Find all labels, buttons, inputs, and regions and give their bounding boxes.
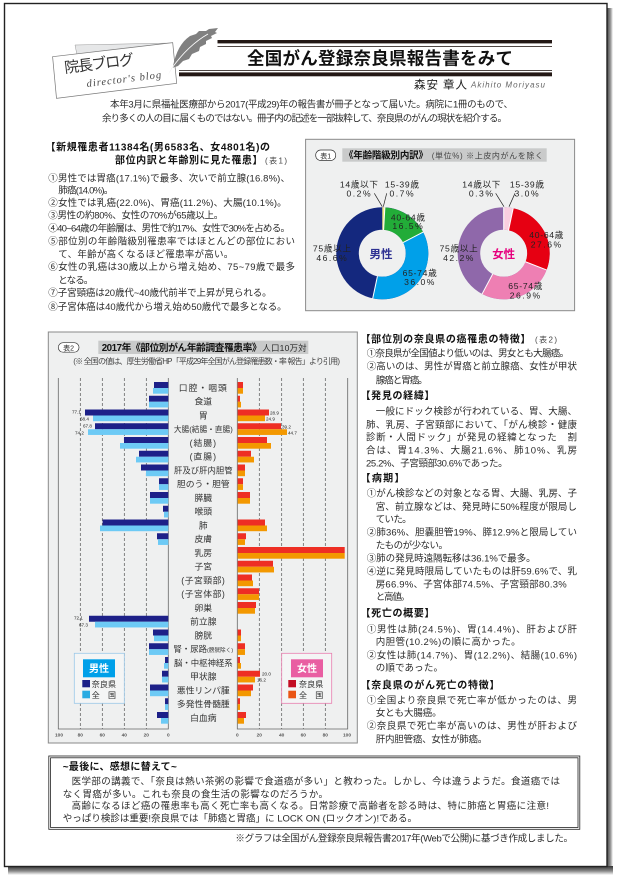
intro text: 余り多くの人の目に届くものではない。冊子内の記述を一部抜粋して、奈良県のがんの現状を紹介する。	[102, 112, 507, 124]
axis tick labels: 100	[55, 732, 63, 738]
author: Akihito Moriyasu	[470, 80, 546, 90]
cancer site labels: 子宮	[194, 561, 212, 572]
right text: Nara mortality characteristics: ①全国より奈良県で死亡率が低かったのは、男	[367, 694, 577, 706]
header: title rules and title: 全国がん登録奈良県報告書をみて	[247, 49, 513, 69]
cancer site labels: 胆のう・胆管	[177, 478, 230, 489]
bar value labels: 77.1	[72, 410, 81, 415]
bar value labels: 72.1	[74, 615, 83, 620]
cancer site labels: 喉頭	[194, 506, 212, 517]
heading: 2017 incidence rate: 人口10万対	[262, 343, 307, 353]
bar value labels: 68.4	[80, 416, 89, 421]
cancer site labels: 乳房	[194, 547, 212, 558]
bar value labels: 39.2	[282, 424, 291, 429]
donut chart: male	[348, 207, 423, 299]
donut chart: female	[469, 207, 547, 294]
right text: mortality overview: ②女性は肺(14.7%)、胃(12.2%)、結腸(10.6%)	[367, 649, 577, 661]
right text: Nara mortality characteristics: ②奈良県で死亡率が高いのは、男性が肝および	[367, 720, 577, 732]
right text: disease stage: ②肺36%、胆嚢胆管19%、膵12.9%と限局してい	[367, 526, 577, 538]
donut labels	[313, 178, 564, 300]
bar value labels: 28.9	[270, 410, 279, 415]
axis tick labels	[55, 732, 351, 738]
left text: new patients summary: ⑧子宮体癌は40歳代から増え始め50歳代で最多となる。	[48, 301, 287, 313]
cancer site labels: 腎・尿路(膀胱除く)	[173, 644, 233, 654]
axis tick labels: 20	[144, 732, 149, 738]
donut labels: 36.0%	[404, 277, 436, 287]
bars: male national	[88, 388, 168, 724]
cancer site labels: 卵巣	[194, 602, 212, 613]
donut labels: 15-39歳	[385, 178, 420, 189]
left text: new patients summary: となる。	[58, 275, 93, 286]
panel: incidence rate by site bar chart	[48, 332, 357, 743]
right text: Nara mortality characteristics: 【奈良県のがん死亡の特徴】	[360, 678, 500, 691]
legend: female	[282, 653, 332, 703]
left text: new patients summary: ⑦子宮頸癌は20歳代~40歳代前半で上昇が見られる。	[48, 287, 272, 299]
header: blog card: 院長ブログ	[63, 51, 135, 77]
bar value labels: 20.0	[262, 672, 271, 677]
donut labels: 42.2%	[443, 253, 475, 263]
right text: disease stage: 宮、前立腺などは、発見時に50%程度が限局し	[376, 501, 577, 513]
right text: disease stage: 【病期】	[360, 472, 404, 485]
cancer site labels: 肺	[199, 520, 208, 530]
donut labels: 40-64歳	[529, 229, 564, 240]
axis tick labels: 60	[301, 732, 306, 738]
right text: Nara mortality characteristics	[360, 678, 577, 745]
donut labels: 0.2%	[347, 189, 372, 199]
badge: table 2	[58, 343, 79, 352]
right text: disease stage: ていた。	[376, 515, 412, 526]
cancer site labels: 甲状腺	[190, 671, 217, 682]
left text: new patients summary: ③男性の約80%、女性の70%が65歳以上。	[48, 210, 223, 222]
right text: Nara mortality characteristics: 肝内胆管癌、女性が肺癌。	[376, 733, 487, 745]
heading: age group breakdown: 《年齢階級別内訳》	[344, 150, 428, 162]
bar value labels: 74.2	[75, 430, 84, 435]
heading: age group breakdown	[342, 148, 547, 162]
donut labels: 14歳以下	[340, 178, 379, 189]
right text: discovery circumstances: 診断・人間ドック」が発見の経緯となった 割	[366, 432, 577, 444]
note: data source: (※ 全国の値は、厚生労働省HP「平成29年全国がん登録罹患数・率 報告」より引用)	[73, 356, 340, 366]
legend: male: 奈良県	[92, 679, 116, 689]
donut labels: 27.6%	[531, 239, 563, 249]
author	[414, 77, 546, 91]
cancer site labels: 前立腺	[190, 616, 217, 627]
right text: site characteristics: 腺癌と胃癌。	[376, 374, 428, 386]
cancer site labels: (子宮頸部)	[181, 574, 225, 586]
cancer site labels: (直腸)	[190, 451, 217, 462]
closing remarks box: やっぱり検診は重要!奈良県では「肺癌と胃癌」に LOCK ON (ロックオン)!である。	[63, 813, 417, 825]
heading: 2017 incidence rate: 2017年《部位別がん年齢調査罹患率》	[102, 341, 262, 354]
right text: mortality overview: ①男性は肺(24.5%)、胃(14.4%)、肝および肝	[367, 623, 577, 635]
cancer site labels: 胃	[199, 410, 208, 420]
cancer site labels: 皮膚	[194, 533, 212, 544]
right text: disease stage: 房66.9%、子宮体部74.5%、子宮頸部80.3%	[376, 579, 567, 591]
right text: Nara mortality characteristics: 女とも大腸癌。	[376, 707, 442, 719]
cancer site labels: 多発性骨髄腫	[177, 698, 230, 709]
donut labels: 75歳以上	[440, 242, 478, 253]
donut labels: 15-39歳	[510, 178, 545, 189]
left text: new patients summary	[46, 141, 295, 313]
legend: male: 男性	[89, 662, 109, 675]
left text: new patients summary: 【新規罹患者11384名(男6583名、女4801名)の	[46, 141, 270, 154]
left text: new patients summary: て、年齢が高くなるほど罹患率が高い。	[58, 248, 233, 260]
right text: mortality overview	[360, 607, 577, 674]
right text: site characteristics: ①奈良県が全国値より低いのは、男女とも大腸癌。	[367, 348, 569, 360]
legend: male: 全 国	[92, 690, 116, 700]
left text: new patients summary: 肺癌(14.0%)。	[58, 184, 113, 196]
axis tick labels: 20	[257, 732, 262, 738]
donut chart: female: 女性	[492, 247, 516, 261]
closing remarks box: ~最後に、感想に替えて~	[63, 760, 177, 773]
cancer site labels: 悪性リンパ腫	[177, 684, 230, 696]
right text: discovery circumstances: 肺、乳房、子宮頸部において、「がん検診・健康	[366, 419, 577, 431]
axis tick labels: 60	[100, 732, 105, 738]
cancer site labels: (子宮体部)	[181, 588, 225, 599]
legend: female: 女性	[297, 662, 317, 675]
closing remarks box: 高齢になるほど癌の罹患率も高く死亡率も高くなる。日常診療で高齢者を診る時は、特に肺癌と胃癌に注意!	[72, 800, 549, 812]
axis tick labels: 100	[343, 732, 351, 738]
cancer site labels: 食道	[194, 396, 212, 407]
left text: new patients summary: (表1)	[265, 155, 287, 165]
right text: site characteristics: ②高いのは、男性が胃癌と前立腺癌、女性が甲状	[367, 360, 577, 372]
donut labels: 0.7%	[390, 189, 415, 199]
badge: table 1	[316, 150, 336, 160]
donut labels: 3.0%	[515, 189, 540, 199]
right text: disease stage: と高値。	[376, 591, 410, 603]
axis tick labels: 40	[279, 732, 285, 738]
bars: male Nara	[85, 382, 168, 718]
cancer site labels: 膀胱	[194, 630, 212, 640]
legend: male	[74, 653, 124, 703]
intro text	[102, 98, 513, 124]
left text: new patients summary: ⑤部位別の年齢階級別罹患率ではほとんどの部位におい	[48, 236, 295, 248]
right text: site characteristics	[360, 332, 577, 386]
right text: disease stage: ③肺の発見時遠隔転移は36.1%で最多。	[367, 553, 536, 565]
left text: new patients summary: 部位内訳と年齢別に見た罹患】	[115, 153, 262, 166]
cancer site labels: 脳・中枢神経系	[174, 658, 233, 668]
right text: mortality overview: 内胆管(10.2%)の順に高かった。	[376, 636, 521, 648]
heading: age group breakdown: (単位%) ※上皮内がんを除く	[432, 150, 543, 160]
bar value labels: 44.7	[288, 430, 297, 435]
closing remarks box	[49, 756, 580, 829]
axis tick labels: 0	[167, 732, 170, 738]
left text: new patients summary: ⑥女性の乳癌は30歳以上から増え始め、75~79歳で最多	[48, 261, 295, 273]
right text: mortality overview: 【死亡の概要】	[360, 607, 434, 620]
right text: mortality overview: の順であった。	[376, 663, 443, 674]
cancer site labels: 白血病	[190, 712, 217, 723]
right text: discovery circumstances: 合は、胃14.3%、大腸21.6%、肺10%、乳房	[366, 444, 577, 456]
left text: new patients summary: ②女性では乳癌(22.0%)、胃癌(11.2%)、大腸(10.1%)。	[48, 197, 287, 209]
closing remarks box: なく胃癌が多い。これも奈良の食生活の影響なのだろうか。	[63, 788, 328, 800]
right text: discovery circumstances: 【発見の経緯】	[360, 389, 434, 402]
right text: disease stage	[360, 472, 577, 603]
donut labels: 14歳以下	[462, 178, 501, 189]
heading: 2017 incidence rate	[98, 341, 308, 354]
left text: new patients summary: ①男性では胃癌(17.1%)で最多、次いで前立腺(16.8%)、	[48, 172, 290, 184]
axis tick labels: 80	[78, 732, 83, 738]
author: 森安 章人	[414, 77, 468, 91]
axis tick labels: 80	[323, 732, 328, 738]
footnote: ※グラフは全国がん登録奈良県報告書2017年(Webで公開)に基づき作成しました。	[235, 832, 573, 844]
icon: quill feather	[168, 28, 218, 75]
donut labels: 65-74歳	[403, 267, 437, 278]
cancer site labels: 口腔・咽頭	[179, 383, 228, 393]
right text: discovery circumstances	[360, 389, 577, 470]
cancer site labels: 大腸(結腸・直腸)	[174, 424, 233, 434]
donut labels: 40-64歳	[391, 211, 426, 222]
donut labels: 0.3%	[469, 189, 494, 199]
header: blog card	[53, 43, 177, 98]
right text: disease stage: ④逆に発見時限局していたものは肝59.6%で、乳	[367, 565, 577, 577]
donut labels: 65-74歳	[508, 280, 543, 291]
bar value labels	[72, 410, 297, 683]
donut labels: 26.9%	[510, 290, 542, 300]
bars: female national	[238, 388, 345, 724]
axis tick labels: 0	[236, 732, 239, 738]
legend: female: 全 国	[299, 690, 323, 700]
donut labels: 46.6%	[316, 253, 348, 263]
right text: site characteristics: (表2)	[535, 334, 557, 344]
donut labels: 75歳以上	[313, 242, 352, 253]
right text: discovery circumstances: 25.2%、子宮頸部30.6%であった。	[366, 458, 508, 470]
intro text: 本年3月に県福祉医療部から2017(平成29)年の報告書が冊子となって届いた。病院に1冊のもので、	[110, 98, 513, 110]
closing remarks box: 医学部の講義で、「奈良は熱い茶粥の影響で食道癌が多い」と教わった。しかし、今は違うようだ。食道癌では	[72, 775, 560, 787]
bar value labels: 24.9	[266, 417, 275, 422]
chart axes and grid	[58, 378, 348, 729]
donut chart: male: 男性	[370, 247, 393, 261]
header: title rules and title	[179, 40, 552, 76]
right text: site characteristics: 【部位別の奈良県の癌罹患の特徴】	[360, 332, 530, 345]
right text: disease stage: ①がん検診などの対象となる胃、大腸、乳房、子	[367, 488, 577, 500]
right text: discovery circumstances: 一般にドック検診が行われている、胃、大腸、	[376, 405, 577, 417]
badge: table 2: 表2	[63, 343, 74, 352]
bar value labels: 67.8	[83, 424, 92, 429]
header: blog card: director's blog	[86, 70, 162, 90]
left text: new patients summary: ④40~64歳の年齢層は、男性で約17%、女性で30%を占める。	[48, 223, 290, 235]
bar value labels: 16.2	[257, 678, 266, 683]
badge: table 1: 表1	[320, 151, 331, 160]
bars: female Nara	[238, 382, 345, 718]
cancer site labels	[173, 383, 233, 723]
bar value labels: 67.3	[79, 623, 88, 628]
cancer site labels: (結腸)	[190, 437, 217, 448]
right text: disease stage: たものが少ない。	[376, 539, 448, 551]
cancer site labels: 膵臓	[194, 492, 212, 503]
donut labels: 16.5%	[392, 221, 424, 231]
legend: female: 奈良県	[299, 679, 323, 689]
cancer site labels: 肝及び肝内胆管	[174, 466, 233, 476]
axis tick labels: 40	[122, 732, 127, 738]
panel: age group donut charts	[306, 139, 575, 311]
